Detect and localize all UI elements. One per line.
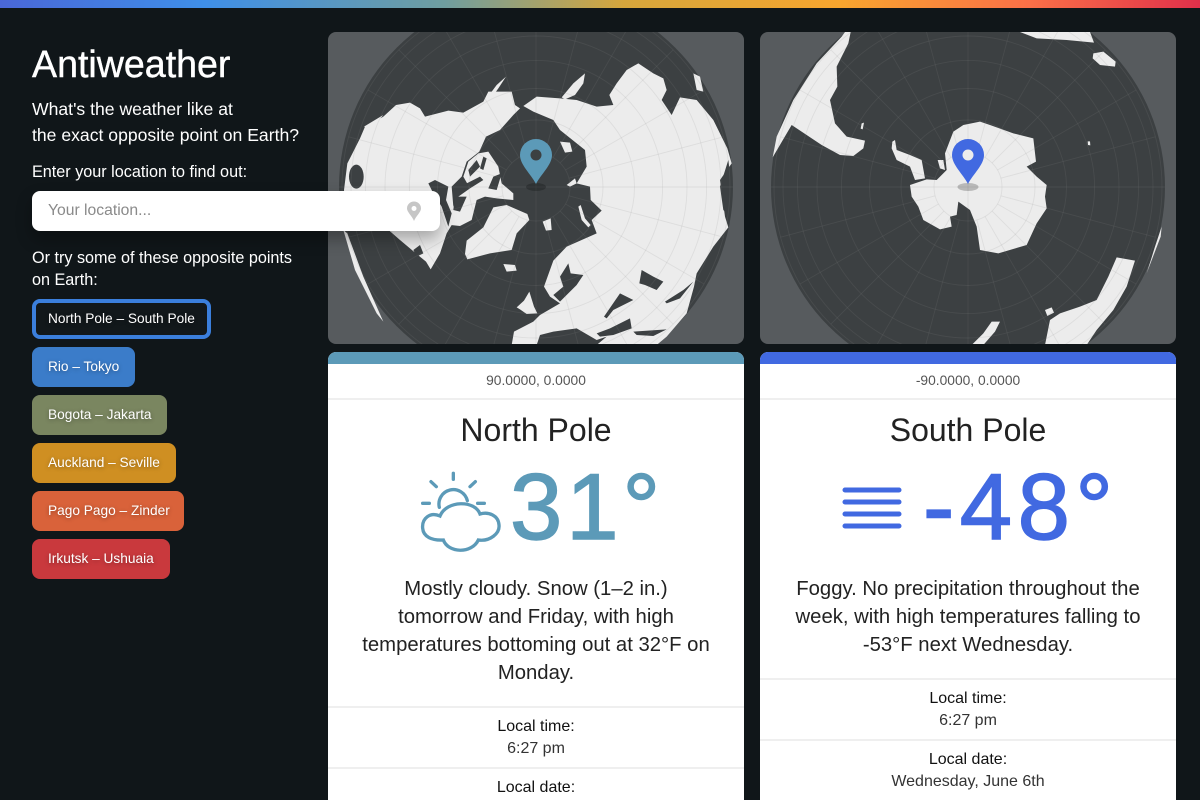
location input	[32, 191, 440, 231]
card colour bar	[760, 352, 1176, 364]
temperature: 31°	[510, 454, 664, 559]
graticule	[771, 0, 1165, 384]
temperature: -48°	[923, 454, 1118, 559]
local time	[497, 718, 575, 757]
land masses	[343, 63, 732, 345]
subtitle: the exact opposite point on Earth?	[32, 125, 299, 145]
suggestions prompt: Or try some of these opposite points	[32, 249, 292, 267]
map panel: north pole	[328, 32, 744, 344]
button: Rio – Tokyo	[32, 347, 135, 387]
local date	[891, 751, 1045, 790]
local date: Wednesday, June 6th	[891, 773, 1045, 790]
subtitle: What's the weather like at	[32, 99, 233, 119]
suggestions prompt	[32, 249, 292, 289]
button: Pago Pago – Zinder	[32, 491, 184, 531]
icon: input pin	[407, 202, 421, 221]
sidebar	[32, 43, 299, 289]
forecast text: Mostly cloudy. Snow (1–2 in.)	[404, 578, 668, 600]
forecast text: temperatures bottoming out at 32°F on	[362, 634, 710, 656]
coordinates: -90.0000, 0.0000	[916, 373, 1020, 388]
icon: map pin north	[520, 139, 552, 191]
title: Antiweather	[32, 43, 230, 85]
local time: 6:27 pm	[507, 740, 565, 757]
button: Irkutsk – Ushuaia	[32, 539, 170, 579]
location name: North Pole	[460, 412, 612, 448]
forecast text: Foggy. No precipitation throughout the	[796, 578, 1140, 600]
icon: sun behind cloud	[420, 472, 501, 552]
weather card: North Pole	[328, 352, 744, 800]
local time: Local time:	[929, 690, 1007, 707]
local date: Local date:	[497, 779, 575, 796]
forecast text: -53°F next Wednesday.	[863, 634, 1073, 656]
land masses	[773, 32, 1162, 345]
local time	[929, 690, 1007, 729]
map panel: south pole	[760, 32, 1176, 344]
suggestions prompt: on Earth:	[32, 271, 98, 289]
card colour bar	[328, 352, 744, 364]
globe disc	[771, 0, 1165, 384]
button: Rio – Tokyo: Rio – Tokyo	[48, 359, 119, 374]
graticule	[339, 0, 733, 384]
button: Irkutsk – Ushuaia: Irkutsk – Ushuaia	[48, 551, 154, 566]
subtitle	[32, 99, 299, 145]
location name: South Pole	[890, 412, 1046, 448]
forecast text: week, with high temperatures falling to	[796, 606, 1140, 628]
button: Bogota – Jakarta: Bogota – Jakarta	[48, 407, 152, 422]
forecast text: tomorrow and Friday, with high	[398, 606, 674, 628]
button: North Pole – South Pole: North Pole – South Pole	[48, 311, 195, 326]
inland seas	[349, 157, 732, 345]
local date: Local date:	[929, 751, 1007, 768]
icon: fog	[842, 488, 902, 528]
placeholder text: Your location...	[48, 202, 151, 219]
button: Pago Pago – Zinder: Pago Pago – Zinder	[48, 503, 170, 518]
icon: map pin south	[952, 139, 984, 191]
globe disc	[339, 0, 733, 384]
button: Auckland – Seville: Auckland – Seville	[48, 455, 160, 470]
coordinates: 90.0000, 0.0000	[486, 373, 586, 388]
button: North Pole – South Pole	[32, 299, 211, 339]
forecast text	[362, 578, 710, 684]
forecast text: Monday.	[498, 662, 574, 684]
local time: 6:27 pm	[939, 712, 997, 729]
weather card: South Pole	[760, 352, 1176, 800]
forecast text	[796, 578, 1140, 656]
button: Bogota – Jakarta	[32, 395, 167, 435]
top gradient bar	[0, 0, 1200, 8]
button: Auckland – Seville	[32, 443, 176, 483]
location prompt: Enter your location to find out:	[32, 163, 247, 181]
local time: Local time:	[497, 718, 575, 735]
